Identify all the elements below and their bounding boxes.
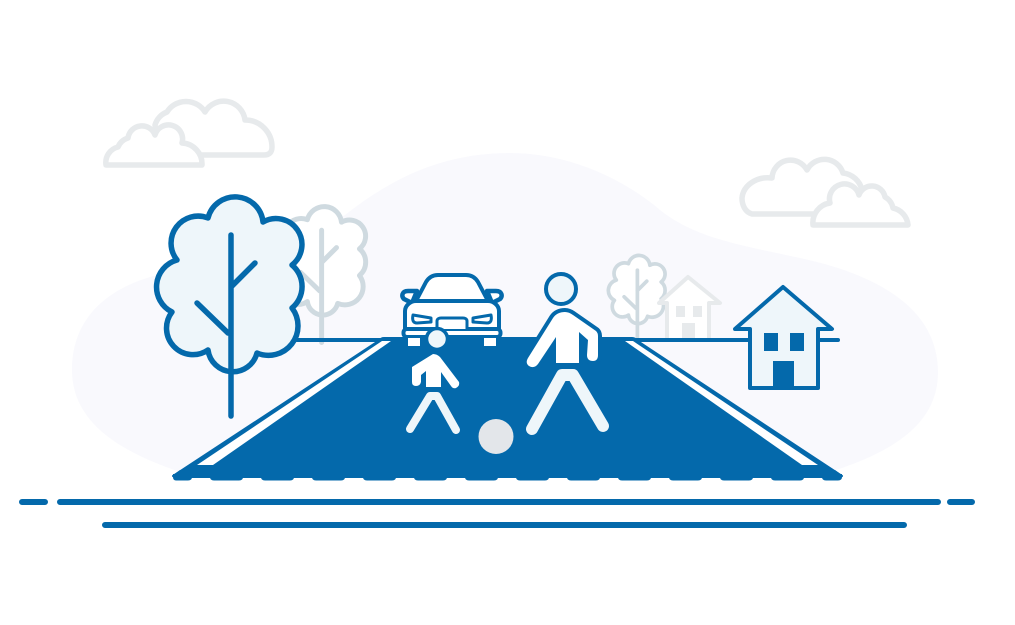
wheels <box>408 338 496 346</box>
headlights <box>413 315 491 323</box>
car <box>402 275 502 346</box>
ground lines <box>22 502 972 525</box>
child figure <box>410 328 459 430</box>
mirrors <box>402 291 502 303</box>
adult legs <box>532 375 603 429</box>
road <box>172 338 843 480</box>
adult head <box>546 274 576 304</box>
child body <box>412 354 459 388</box>
body <box>405 301 499 331</box>
background blob <box>72 153 938 472</box>
child head <box>426 328 448 350</box>
cloud group: upper right <box>742 159 908 225</box>
small back tree <box>608 255 665 341</box>
grille <box>437 318 467 329</box>
roof <box>416 275 488 301</box>
main house <box>735 287 832 388</box>
main tree <box>157 197 302 416</box>
front cloud <box>106 125 202 165</box>
adult figure <box>527 274 603 429</box>
adult body <box>527 312 598 367</box>
road edge tips <box>172 470 843 478</box>
horizon line <box>297 338 838 342</box>
back tree <box>275 207 366 342</box>
back cloud <box>155 101 272 155</box>
ball <box>478 419 514 454</box>
back cloud <box>742 159 862 214</box>
road surface <box>173 338 842 476</box>
right white stripe <box>625 341 818 465</box>
road edge scallops <box>173 474 842 480</box>
child legs <box>410 396 456 430</box>
front cloud <box>813 184 908 225</box>
bumper <box>404 329 500 337</box>
cloud group: upper left <box>106 101 272 165</box>
left white stripe <box>197 341 391 465</box>
back house <box>659 277 720 340</box>
